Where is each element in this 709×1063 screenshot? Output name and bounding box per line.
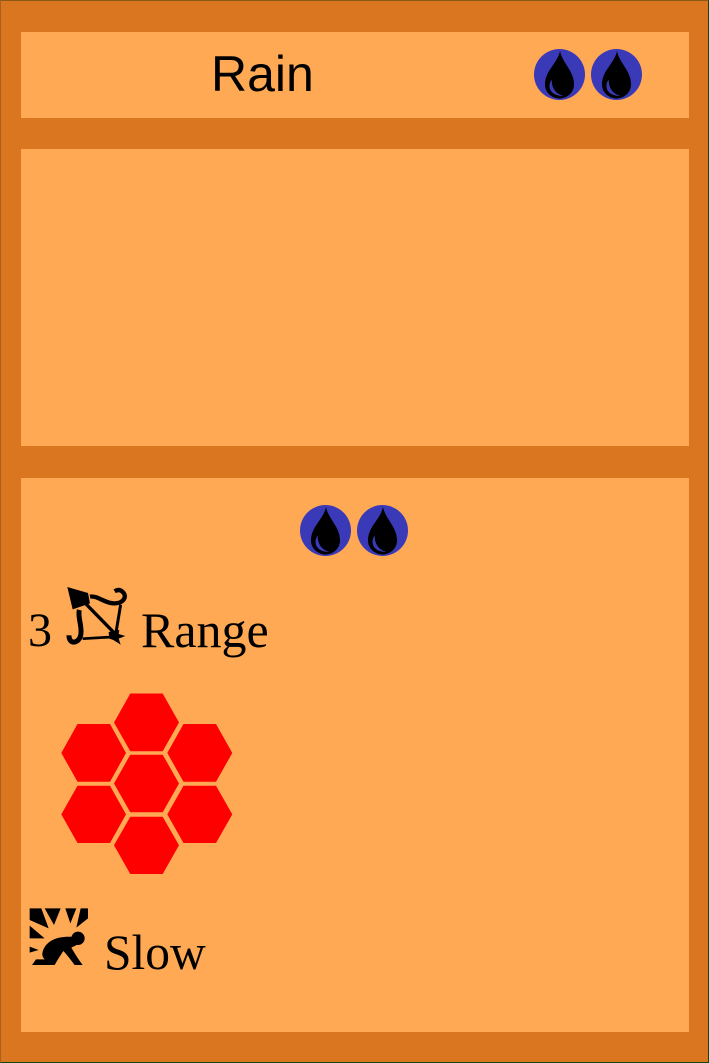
range label: Range [141,602,269,658]
hex: top [114,694,179,751]
hex: upper left [61,724,126,782]
hex: center [114,755,179,812]
hex: bottom [114,817,179,874]
icon: water cost drop 2 [591,49,642,100]
range number: 3 [28,604,52,657]
panel: art area [21,149,689,446]
title: Rain [211,46,314,102]
icon: bow and arrow [67,587,125,645]
hex area diagram [61,694,232,874]
icon: water element drop 1 [300,505,351,556]
icon: water element drop 2 [357,505,408,556]
hex: lower right [167,786,232,843]
icon: slow status [30,908,88,965]
panel: rules area [21,478,689,1032]
icon: water cost drop 1 [534,49,585,100]
panel: title bar [21,32,689,118]
slow label: Slow [104,925,206,980]
hex: lower left [61,786,126,843]
hex: upper right [167,724,232,782]
